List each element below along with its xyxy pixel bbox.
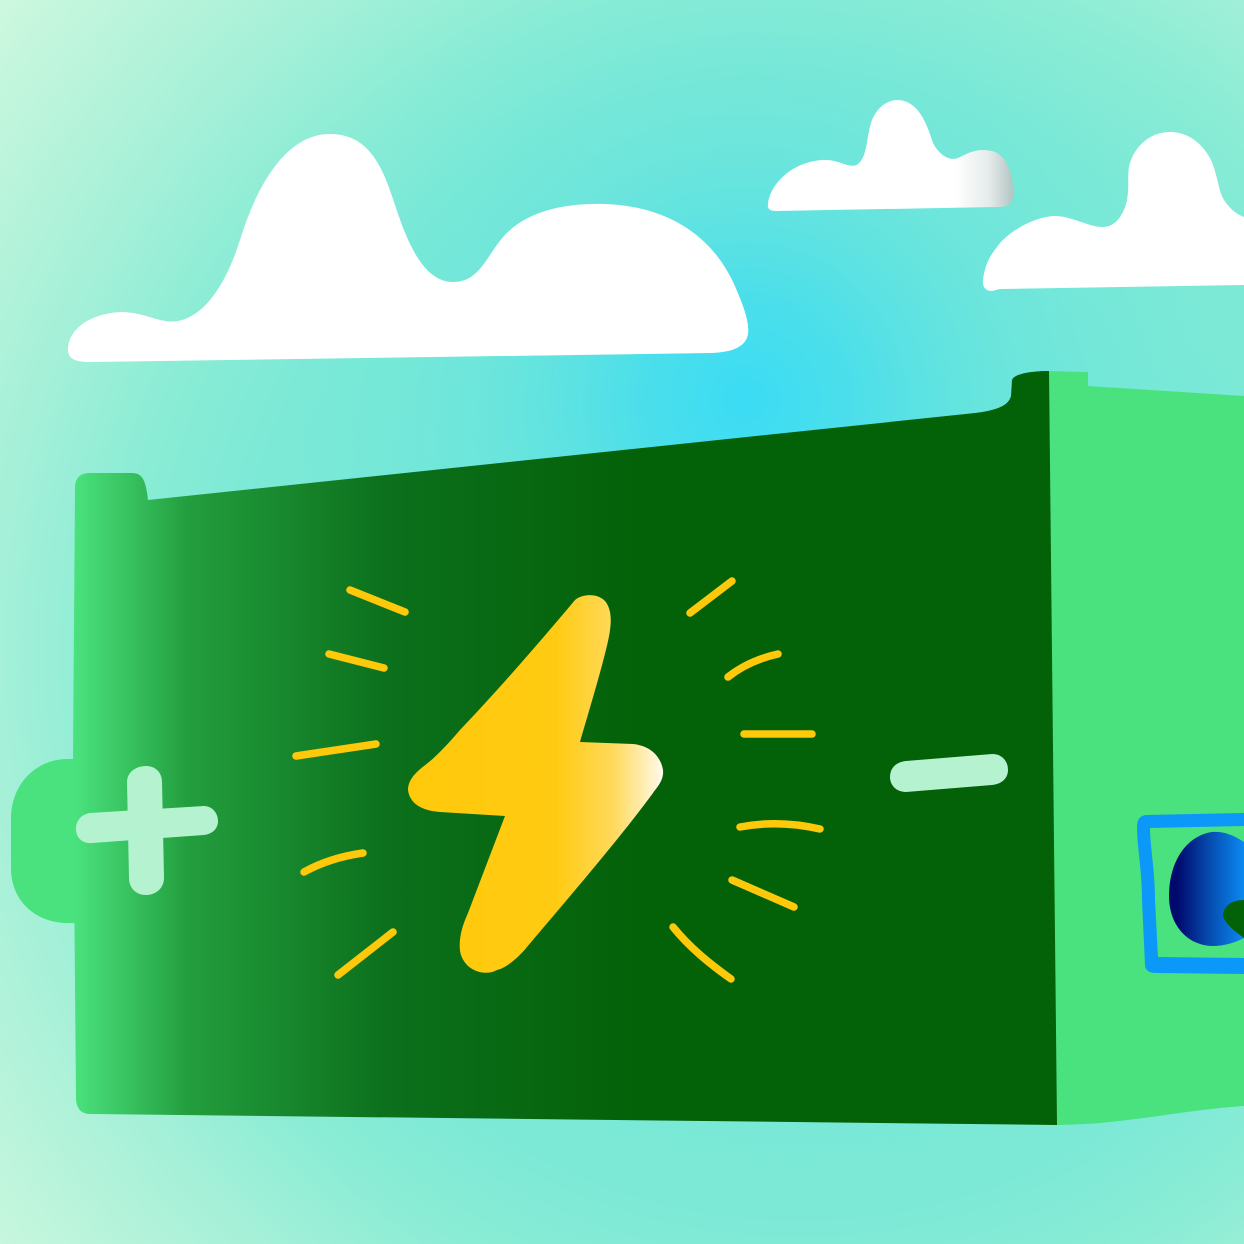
- battery: plus sign: [76, 766, 218, 895]
- battery: positive terminal: [11, 759, 82, 923]
- cloud: right edge: [983, 132, 1244, 291]
- battery: front face: [73, 371, 1057, 1125]
- label frame: [1137, 813, 1244, 974]
- battery: side panel: [1040, 371, 1244, 1125]
- battery: energy rays: [296, 581, 820, 979]
- cloud: large left: [68, 134, 748, 362]
- battery: lightning bolt: [408, 595, 663, 973]
- globe land: [1223, 900, 1244, 938]
- battery: minus sign: [890, 754, 1008, 792]
- globe: [1169, 832, 1244, 946]
- cloud: small top: [768, 100, 1013, 211]
- battery: recycling label icon: [1137, 813, 1244, 974]
- battery: [11, 371, 1244, 1125]
